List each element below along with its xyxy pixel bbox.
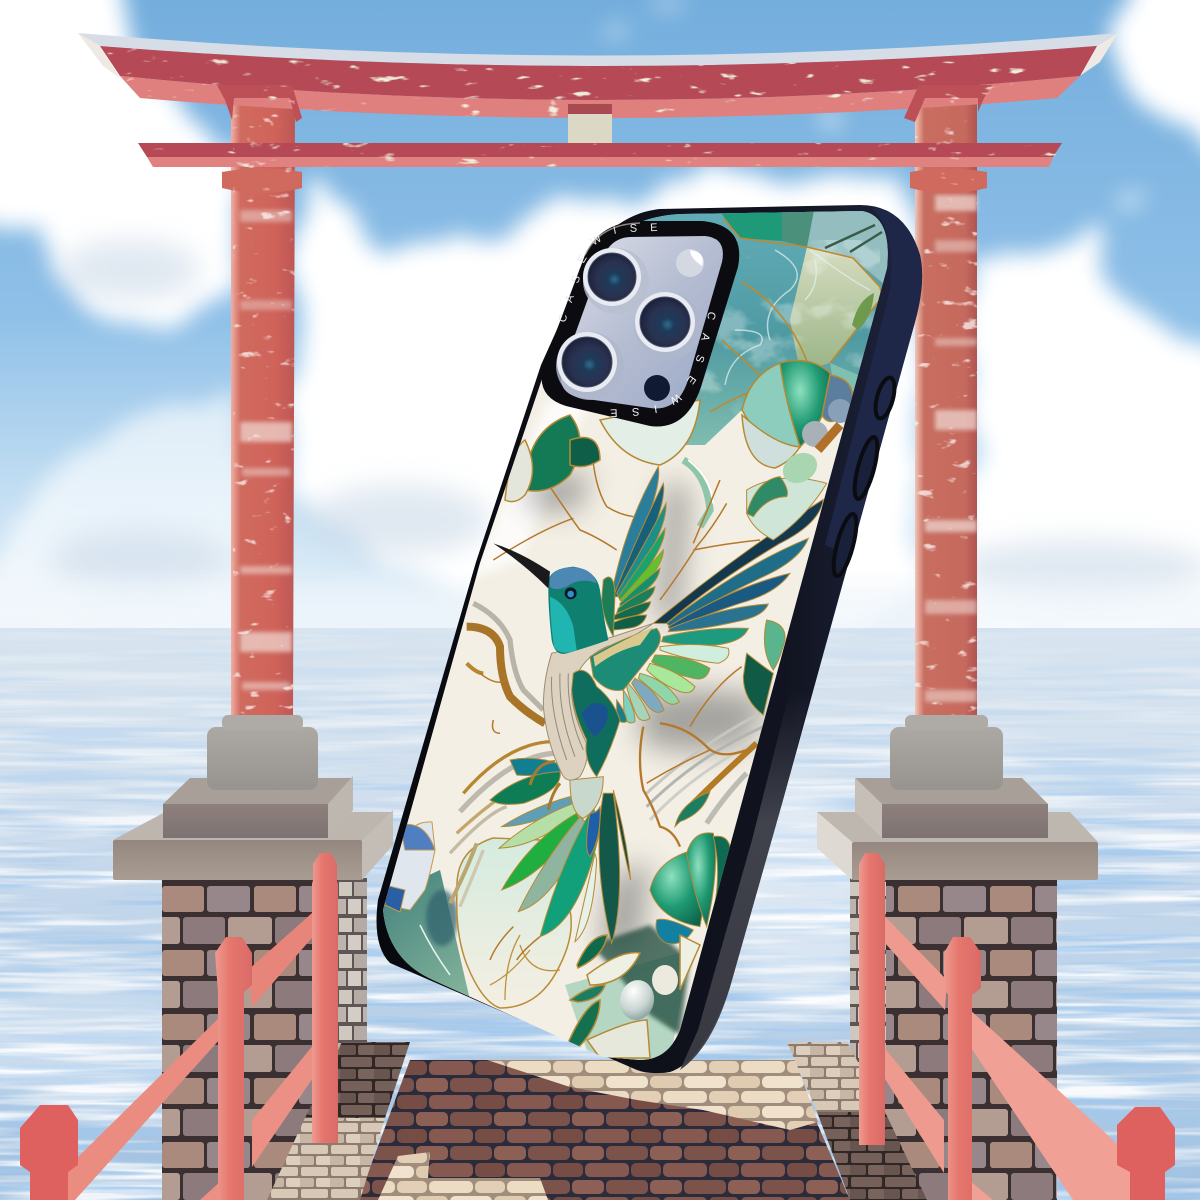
middle post	[944, 937, 981, 1200]
upper rail near	[248, 897, 330, 1007]
bird and veins at crop scale	[450, 460, 827, 960]
dark hollow	[426, 890, 458, 946]
blue patch	[582, 703, 608, 737]
left pillar cap	[217, 85, 302, 122]
top beam rim	[78, 33, 1118, 66]
slab front	[852, 842, 1098, 880]
block	[890, 727, 1003, 790]
white belly	[543, 623, 653, 780]
bottom leaves	[568, 935, 700, 1058]
feet	[530, 762, 560, 810]
gold veins	[480, 463, 760, 960]
gold lines top	[710, 218, 882, 412]
dark corner lines	[825, 225, 882, 252]
upper rail far	[40, 997, 240, 1200]
neck and throat	[548, 567, 608, 654]
beak	[493, 543, 550, 588]
lens two	[634, 292, 702, 360]
tail	[499, 790, 631, 943]
weathered beam paint	[107, 48, 1056, 167]
flower top right	[742, 361, 852, 468]
green leaf	[490, 772, 560, 804]
bottom pearls	[617, 965, 678, 1023]
right pillar	[915, 100, 977, 718]
right railing	[859, 853, 1175, 1200]
belly contour lines	[552, 673, 583, 760]
pale white veins	[420, 925, 450, 975]
front post	[20, 1105, 78, 1200]
volume up	[850, 435, 882, 501]
slab front	[113, 840, 362, 880]
covert highlights	[593, 627, 653, 667]
brand text upper: CASEWISE	[559, 223, 658, 322]
phone case	[376, 205, 943, 1109]
lower right leaf	[675, 792, 710, 827]
lit leaf	[852, 293, 874, 330]
lower rail near	[252, 1027, 330, 1167]
brand text lower: CASEWISE	[610, 312, 716, 417]
lower rail near	[867, 1027, 944, 1173]
sea	[0, 628, 1200, 1200]
slab top	[113, 812, 393, 842]
upper right leaf	[747, 478, 827, 540]
upper rail near	[867, 898, 947, 1010]
step side	[855, 778, 882, 838]
agate bands	[450, 460, 763, 907]
top beam underside	[120, 76, 1080, 118]
upper right leaf dark part	[747, 477, 787, 517]
right collar	[910, 168, 987, 193]
left curb light	[267, 1118, 385, 1200]
brick column front	[162, 878, 338, 1200]
shaded paving	[358, 1060, 850, 1200]
lower rail far	[200, 1170, 240, 1200]
dark foliage base	[590, 925, 690, 1035]
sunlit paving	[487, 1060, 818, 1130]
slab top	[817, 812, 1098, 842]
brick column front	[885, 878, 1057, 1200]
flash	[676, 249, 704, 277]
marble clouding	[690, 240, 880, 420]
side leaves	[510, 758, 562, 776]
front post	[1117, 1107, 1175, 1200]
torii gate	[78, 33, 1118, 720]
left white reflection	[470, 400, 590, 580]
disc veins	[490, 935, 560, 1000]
left stone base	[113, 715, 393, 1200]
case body	[376, 205, 922, 1073]
shadows	[530, 470, 770, 950]
slab side	[817, 812, 852, 880]
left curb dark	[305, 1042, 410, 1118]
bezel highlight	[585, 223, 640, 255]
step front	[882, 804, 1048, 838]
blue-grey corner	[806, 211, 888, 283]
case artwork	[375, 205, 900, 1065]
shell	[822, 375, 852, 421]
bottom band	[565, 950, 690, 1060]
centre strut	[568, 104, 612, 143]
camera ring	[542, 221, 740, 426]
teal marble top	[643, 211, 888, 445]
right curb dark	[817, 1112, 927, 1200]
left pillar	[231, 100, 295, 718]
lens one	[583, 248, 649, 314]
sage marble panel	[790, 247, 882, 372]
post near gate	[859, 853, 885, 1145]
lower beam	[138, 143, 1062, 167]
right pillar cap	[904, 85, 992, 122]
white disc	[457, 838, 571, 1008]
eye	[565, 587, 577, 599]
collar	[222, 715, 303, 730]
lower right marble	[830, 363, 858, 408]
upper rail far	[957, 998, 1160, 1200]
green top leaf two	[782, 212, 814, 246]
right curb light	[787, 1042, 885, 1112]
top beam end caps	[78, 33, 1118, 78]
main wing	[617, 499, 823, 723]
step top	[163, 778, 353, 804]
brick column side	[850, 878, 886, 1063]
side buttons	[829, 376, 898, 578]
black bezel	[542, 221, 739, 427]
weathered paint	[225, 100, 995, 720]
rump	[570, 777, 603, 818]
pillar weathering bands	[240, 195, 977, 702]
pearls top right	[777, 399, 852, 489]
horizon haze	[0, 585, 1200, 635]
navy upper side sheen	[825, 208, 922, 555]
step side	[328, 776, 353, 838]
lidar	[644, 375, 670, 401]
left collar	[222, 168, 302, 193]
stone bridge	[267, 1042, 927, 1200]
action button	[872, 376, 898, 420]
brick column side	[338, 878, 367, 1068]
sun patches lower left	[378, 1152, 548, 1200]
post near gate	[312, 853, 338, 1143]
sky	[0, 0, 1200, 630]
green flower lower	[650, 833, 730, 944]
volume down	[829, 512, 861, 578]
blue cap	[550, 567, 597, 589]
middle post	[215, 937, 252, 1200]
translucent lower side	[680, 690, 812, 1070]
white marble veins	[725, 250, 870, 385]
step top	[855, 778, 1048, 804]
throat highlight	[550, 597, 577, 653]
inner wing	[572, 670, 620, 777]
wing coverts	[590, 628, 660, 691]
top beam face	[100, 46, 1097, 100]
step front	[163, 804, 328, 838]
block	[207, 727, 318, 790]
green top leaf	[722, 212, 788, 241]
camera plate	[561, 236, 723, 408]
hummingbird	[490, 467, 823, 943]
pale bottom marble	[383, 870, 470, 996]
clouds	[0, 0, 1200, 640]
left railing	[20, 853, 338, 1200]
collar	[905, 715, 988, 730]
flower top left	[505, 400, 700, 502]
slab side	[362, 810, 393, 880]
left blue flower	[385, 822, 435, 912]
lower rail far	[957, 1170, 993, 1200]
right stone base	[817, 715, 1098, 1200]
marble base	[375, 205, 895, 1065]
upper wing	[602, 467, 666, 637]
right leaf by wing	[743, 620, 785, 715]
lens three	[556, 332, 624, 400]
cloud shading	[50, 240, 1200, 600]
